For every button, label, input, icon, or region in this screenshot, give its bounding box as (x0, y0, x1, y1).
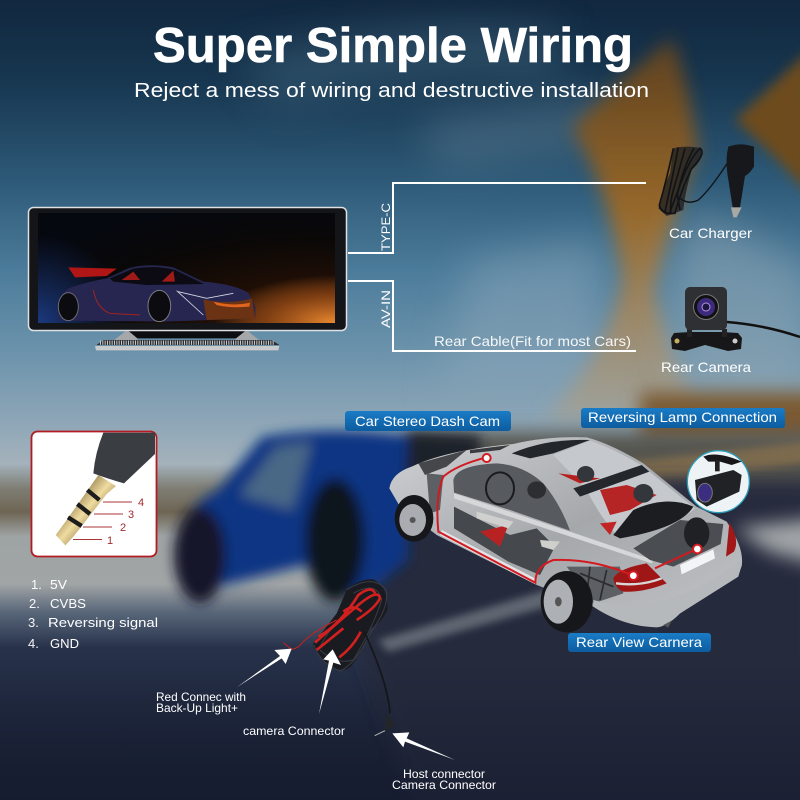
pinout legend: CVBS (50, 596, 86, 611)
pinout legend: 5V (50, 577, 67, 592)
screen (38, 213, 335, 323)
arrow: red wire (237, 649, 292, 687)
label: camera connector: camera Connector (243, 724, 345, 738)
tag: car stereo dash cam: Car Stereo Dash Cam (355, 413, 500, 429)
pinout legend: 1. (31, 577, 42, 592)
label: rear camera: Rear Camera (661, 359, 751, 375)
supercar on screen (58, 265, 255, 322)
seats (477, 466, 657, 550)
pinout legend (28, 577, 158, 651)
pin numbers (107, 497, 144, 547)
label: host connector: Camera Connector (392, 778, 496, 792)
jack plug (56, 433, 155, 545)
cutaway car with wiring (389, 437, 749, 632)
label: red connector: Back-Up Light+ (156, 701, 238, 715)
arrow: host connector (392, 732, 455, 760)
car charger icon (658, 144, 754, 217)
pin leader lines (73, 502, 132, 540)
label: car charger: Car Charger (669, 225, 752, 241)
label: red connector: Red Connec with (156, 690, 246, 704)
label: red connector (156, 690, 246, 715)
wheels (395, 495, 593, 632)
tag: reversing lamp connection (581, 408, 785, 428)
tag: car stereo dash cam (345, 411, 511, 431)
subtitle: Reject a mess of wiring and destructive installation (134, 80, 649, 102)
pinout legend: 2. (29, 596, 40, 611)
cable coil (237, 579, 455, 760)
trunk and engine details (418, 445, 723, 603)
arrow: camera connector (319, 649, 341, 714)
pin numbers: 2 (120, 522, 126, 534)
inset: camera in circle (687, 451, 749, 513)
title: Super Simple Wiring (153, 19, 633, 73)
pin numbers: 3 (128, 509, 134, 521)
tag: reversing lamp connection: Reversing Lamp Connection (588, 409, 777, 425)
rear camera icon (671, 287, 800, 351)
label: AV-IN: AV-IN (379, 290, 393, 328)
stand (95, 329, 279, 350)
display unit (28, 208, 346, 350)
label: rear cable: Rear Cable(Fit for most Cars) (434, 333, 631, 349)
blurred blue car (174, 431, 480, 603)
pinout legend: GND (50, 636, 79, 651)
tag: rear view camera (568, 633, 711, 652)
pin numbers: 4 (138, 497, 144, 509)
pinout legend: 3. (28, 615, 39, 630)
pinout legend: Reversing signal (48, 615, 158, 630)
label: host connector: Host connector (403, 767, 485, 781)
car body (389, 437, 742, 627)
tail lights and plate (593, 523, 742, 628)
red wire route (437, 457, 697, 583)
connector lines (348, 183, 646, 351)
tag: rear view camera: Rear View Carnera (576, 634, 702, 650)
pinout legend: 4. (28, 636, 39, 651)
pin numbers: 1 (107, 535, 113, 547)
wire points (483, 454, 702, 580)
label: host connector (392, 767, 496, 792)
jack pinout panel (32, 432, 156, 556)
label: TYPE-C: TYPE-C (379, 203, 393, 251)
